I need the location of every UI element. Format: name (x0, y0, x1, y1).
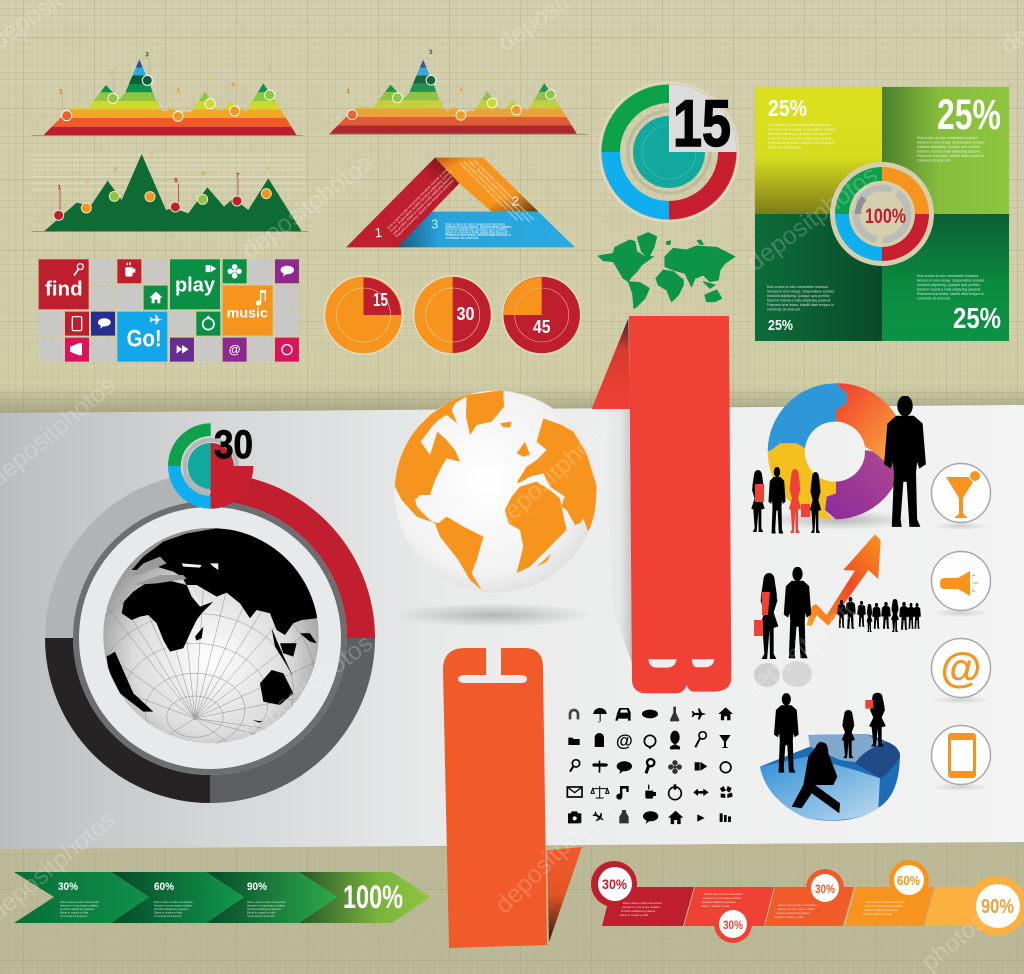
chart: green mountain: 3 (113, 166, 117, 173)
green arrow timeline: Etiam in mauris a nulla (154, 910, 183, 914)
red to orange ribbon timeline: Duis a risus et odio consectetur (704, 892, 743, 896)
chart: striped mountains left: 5 (208, 76, 212, 83)
silhouette: businessman (884, 395, 926, 527)
watermark text: depositphotos (488, 409, 623, 534)
icon circle: phone (931, 726, 991, 791)
green arrow timeline: 30% (58, 881, 78, 893)
watermark text: depositphotos (738, 583, 875, 705)
pie: 30 (414, 276, 492, 354)
panel: four quadrants 25 percent: tincidunt adipiscing. Quisque quis porttitor. (917, 145, 981, 149)
red to orange ribbon timeline: Etiam in mauris a nulla (863, 912, 892, 916)
panel: four quadrants 25 percent: commodo sit amet est. (767, 308, 801, 312)
chart: striped mountains middle (320, 49, 588, 134)
red to orange ribbon timeline: Etiam in mauris a nulla (620, 913, 649, 917)
green arrow timeline: tincidunt adipiscing quisque (60, 907, 95, 911)
triangle ribbon: 2 (512, 194, 519, 209)
triangle ribbon: Duis a risus et odio consectetur tincidunt. Aenean in urna (473, 159, 535, 221)
red to orange ribbon timeline (591, 860, 1024, 943)
orange globe with shadow (393, 390, 597, 627)
red to orange ribbon timeline: 90% (981, 896, 1014, 918)
panel: four quadrants 25 percent: tincidunt adipiscing. Quisque quis porttitor. (917, 283, 981, 287)
small donut: 30: 30 (214, 423, 253, 467)
red to orange ribbon timeline: tincidunt adipiscing quisque (776, 911, 811, 915)
tile menu: Go! (127, 326, 162, 353)
triangle ribbon (346, 153, 575, 247)
green arrow timeline: commodo sit amet est (247, 914, 275, 918)
triangle ribbon: quis porttitor. Etiam in mauris a nulla adipiscing placerat. (463, 160, 525, 222)
red to orange ribbon timeline: Aenean in urna neque sodales (703, 896, 742, 900)
chart: green mountain: 6 (201, 170, 205, 177)
triangle ribbon: Duis a risus et odio consectetur tincidunt. Aenean in urna (386, 168, 449, 230)
green arrow timeline: Duis a risus et odio consectetur (154, 900, 193, 904)
panel: four quadrants 25 percent: Etiam in mauris a nulla adipiscing placerat. (917, 150, 981, 154)
chart: green mountain (32, 152, 308, 231)
panel: four quadrants 25 percent: Etiam in mauris a nulla adipiscing placerat. (767, 298, 831, 302)
green arrow timeline: 100% (343, 879, 403, 915)
green arrow timeline: Duis a risus et odio consectetur (247, 900, 286, 904)
donut: 15 (600, 82, 738, 222)
red to orange ribbon timeline: Duis a risus et odio consectetur (778, 903, 817, 907)
tile menu: find (45, 278, 83, 301)
panel: four quadrants 25 percent: commodo sit amet est. (917, 158, 951, 162)
panel: four quadrants 25 percent: tincidunt adipiscing. Quisque quis porttitor. (767, 294, 831, 298)
panel: four quadrants 25 percent: Aenean in urna neque. Suspendisse sodales (917, 140, 985, 144)
icon circle: at sign (931, 638, 991, 704)
chart: striped mountains left: 2 (110, 69, 114, 76)
blue 3D pie with silhouettes (760, 693, 900, 821)
panel: four quadrants 25 percent: Duis a risus et odio consectetur tincidunt. (767, 285, 829, 289)
silhouettes: walking group (751, 467, 821, 533)
donut: 15: 15 (673, 86, 731, 160)
triangle ribbon: quis porttitor. Etiam in mauris a nulla adipiscing placerat. (392, 174, 453, 236)
triangle ribbon: Praesent urna lectus, blandit vitae tempus in commodo. (458, 161, 519, 222)
chart: green mountain: 7 (236, 173, 240, 180)
chart: striped mountains middle: 1 (346, 88, 350, 95)
watermark text: depositphotos (489, 789, 619, 919)
small donut: 30 (168, 423, 253, 509)
watermark text: depositphotos (742, 161, 883, 277)
green arrow timeline: Etiam in mauris a nulla (247, 910, 276, 914)
icon circle: cocktail (931, 464, 991, 530)
triangle ribbon: commodo sit amet est. (445, 236, 479, 240)
red to orange ribbon timeline: Duis a risus et odio consectetur (623, 901, 662, 905)
triangle ribbon: 1 (374, 225, 383, 240)
red to orange ribbon timeline: Aenean in urna neque sodales (865, 904, 904, 908)
triangle ribbon: 3 (431, 216, 438, 231)
triangle ribbon: Praesent urna lectus, blandit vitae tempus in commodo. (395, 178, 456, 239)
icon grid (567, 707, 733, 825)
red to orange ribbon timeline: Etiam in mauris a nulla (775, 915, 804, 919)
panel: four quadrants 25 percent: Praesent urna lectus, blandit vitae tempus in (767, 303, 834, 307)
pie: 45: 45 (533, 317, 550, 337)
pie: 30: 30 (456, 304, 474, 324)
red to orange ribbon timeline: Etiam in mauris a nulla (701, 904, 730, 908)
icon circle: megaphone (931, 552, 991, 617)
orange ribbon (443, 648, 582, 948)
growth arrow (807, 534, 881, 626)
panel: four quadrants 25 percent: 25% (937, 91, 1001, 139)
tile menu: play (175, 275, 215, 297)
panel: four quadrants 25 percent: Duis a risus et odio consectetur tincidunt. (917, 274, 979, 278)
watermark text: depositphotos (237, 629, 378, 745)
green arrow timeline: Duis a risus et odio consectetur (60, 900, 99, 904)
chart: striped mountains middle: 4 (459, 87, 463, 94)
panel: four quadrants 25 percent: Etiam in mauris a nulla adipiscing placerat. (768, 136, 832, 140)
red to orange ribbon timeline: tincidunt adipiscing quisque (702, 900, 737, 904)
panel: four quadrants 25 percent: 25% (953, 303, 1001, 335)
panel: four quadrants 25 percent: 100% (865, 205, 906, 228)
green arrow timeline: Aenean in urna neque sodales (247, 904, 286, 908)
red to orange ribbon timeline: 30% (723, 918, 743, 932)
chart: striped mountains left (32, 52, 307, 136)
tile menu: music (227, 304, 268, 320)
panel: four quadrants 25 percent: Praesent urna lectus, blandit vitae tempus in (917, 154, 984, 158)
chart: green mountain: 1 (57, 184, 61, 191)
chart: green mountain: 8 (266, 165, 270, 172)
panel: four quadrants 25 percent: Praesent urna lectus, blandit vitae tempus in (768, 141, 835, 145)
chart: striped mountains left: 6 (231, 82, 235, 89)
puzzle donut (767, 383, 913, 530)
green arrow timeline: tincidunt adipiscing quisque (247, 907, 282, 911)
panel: four quadrants 25 percent: Praesent urna lectus, blandit vitae tempus in (917, 292, 984, 296)
world map: green (598, 233, 735, 308)
icon circle: at sign: @ (941, 644, 981, 691)
green arrow timeline: 60% (154, 881, 174, 893)
silhouettes: crowd (837, 597, 921, 632)
chart: striped mountains left: 7 (267, 67, 271, 74)
panel: four quadrants 25 percent: Duis a risus et odio consectetur tincidunt. (917, 136, 979, 140)
red to orange ribbon timeline: 30% (815, 882, 835, 896)
chart: striped mountains middle: 3 (429, 49, 433, 56)
chart: striped mountains middle: 5 (490, 76, 494, 83)
pie: 15: 15 (373, 290, 388, 310)
pie: 15 (324, 276, 402, 354)
panel: four quadrants 25 percent: Aenean in urna neque. Suspendisse sodales (768, 128, 836, 132)
chart: striped mountains left: 1 (59, 88, 63, 95)
red to orange ribbon timeline: Aenean in urna neque sodales (622, 905, 661, 909)
chart: green mountain: 2 (85, 178, 89, 185)
triangle ribbon: Etiam in mauris a nulla adipiscing placerat. (445, 230, 508, 234)
panel: four quadrants 25 percent: commodo sit amet est. (768, 146, 802, 150)
green arrow timeline: tincidunt adipiscing quisque (154, 907, 189, 911)
green arrow timeline: commodo sit amet est (60, 914, 88, 918)
red to orange ribbon timeline: 60% (897, 873, 920, 888)
panel: four quadrants 25 percent (755, 87, 1009, 341)
watermark text: depositphotos (237, 149, 378, 265)
globe: black continents (103, 528, 319, 744)
icon grid: @ (616, 731, 633, 751)
triangle ribbon: tincidunt adipiscing. Quisque quis porttitor. (445, 228, 508, 232)
chart: striped mountains left: 3 (145, 52, 149, 59)
pie: 45 (503, 276, 581, 354)
silhouettes: couple (754, 567, 812, 687)
panel: four quadrants 25 percent: Duis a risus et odio consectetur tincidunt. (768, 123, 830, 127)
green arrow timeline: Aenean in urna neque sodales (60, 904, 99, 908)
tile menu (39, 259, 299, 362)
triangle ribbon: Praesent urna lectus, blandit vitae tempus in (445, 233, 511, 237)
chart: green mountain: 4 (150, 152, 154, 159)
red to orange ribbon timeline: tincidunt adipiscing quisque (621, 909, 656, 913)
chart: striped mountains left: 4 (176, 87, 180, 94)
red to orange ribbon timeline: Aenean in urna neque sodales (777, 907, 816, 911)
green arrow timeline: Etiam in mauris a nulla (60, 910, 89, 914)
triangle ribbon: Aenean in urna neque. Suspendisse sodales (445, 225, 512, 229)
triangle ribbon: neque. Suspendisse sodales tincidunt adipiscing. Quisque (389, 169, 453, 233)
panel: four quadrants 25 percent: tincidunt adipiscing. Quisque quis porttitor. (768, 132, 832, 136)
big globe ring panel (45, 473, 375, 803)
green arrow timeline (14, 872, 430, 923)
panel: four quadrants 25 percent: 25% (768, 317, 793, 334)
triangle ribbon: Duis a risus et odio consectetur tincidunt. (445, 222, 506, 226)
chart: green mountain: 5 (174, 178, 178, 185)
panel: four quadrants 25 percent: Etiam in mauris a nulla adipiscing placerat. (917, 288, 981, 292)
green arrow timeline: Aenean in urna neque sodales (154, 904, 193, 908)
triangle ribbon: neque. Suspendisse sodales tincidunt adipiscing. Quisque (468, 159, 532, 223)
red to orange ribbon timeline: 30% (602, 876, 627, 892)
panel: four quadrants 25 percent: Aenean in urna neque. Suspendisse sodales (917, 278, 985, 282)
red to orange ribbon timeline: tincidunt adipiscing quisque (864, 908, 899, 912)
panel: four quadrants 25 percent: Aenean in urna neque. Suspendisse sodales (767, 290, 835, 294)
green arrow timeline: commodo sit amet est (154, 914, 182, 918)
panel: four quadrants 25 percent: 25% (768, 95, 807, 121)
red to orange ribbon timeline: Duis a risus et odio consectetur (866, 900, 905, 904)
green arrow timeline: 90% (247, 881, 267, 893)
panel: four quadrants 25 percent: commodo sit amet est. (917, 296, 951, 300)
white diagonal band (0, 405, 1024, 849)
tile menu: @ (229, 343, 240, 357)
red ribbon (592, 316, 731, 693)
